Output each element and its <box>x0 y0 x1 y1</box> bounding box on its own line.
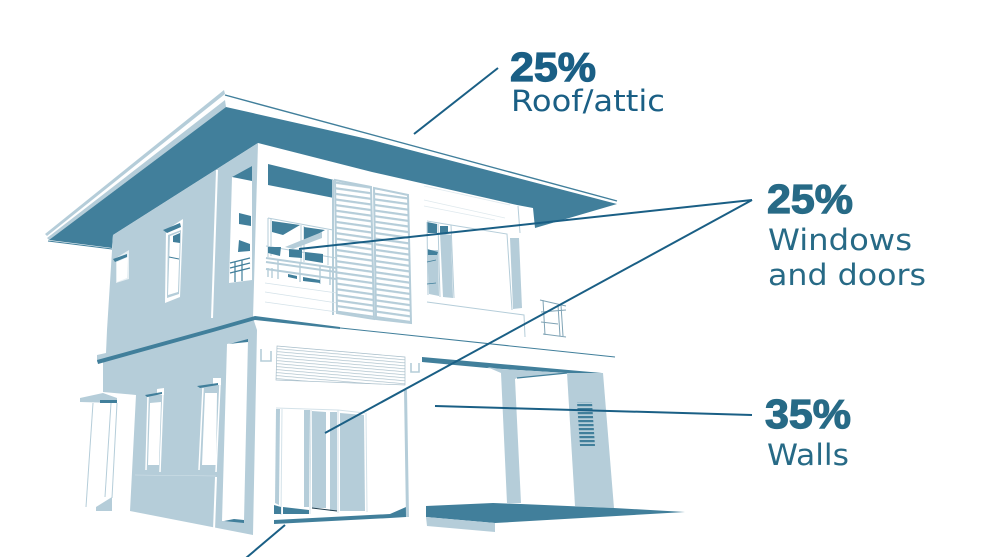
small side railing <box>540 300 566 337</box>
label: roof/attic: Roof/attic <box>511 84 665 118</box>
leader lines <box>246 68 752 557</box>
sliding doors <box>274 408 406 524</box>
carport beam <box>422 357 602 373</box>
label: windows and doors <box>767 176 926 292</box>
label: windows and doors: and doors <box>768 258 926 292</box>
label: roof/attic: 25% <box>510 44 596 90</box>
label: walls: 35% <box>765 391 851 437</box>
carport column right <box>567 373 614 508</box>
balcony railing <box>265 258 337 312</box>
roof <box>45 90 617 249</box>
label: windows and doors: Windows <box>768 223 912 257</box>
floor band <box>97 316 340 364</box>
thin post <box>404 390 409 517</box>
lower wall details <box>135 339 248 530</box>
leader: roof <box>414 68 498 134</box>
lower window left <box>145 388 164 472</box>
label: walls: Walls <box>767 438 849 472</box>
label: windows and doors: 25% <box>767 176 853 222</box>
leader: floor <box>246 525 285 557</box>
brackets <box>261 349 419 372</box>
side porch <box>80 393 117 511</box>
siding lines <box>424 186 510 220</box>
leader: walls <box>435 406 752 415</box>
leader: windows <box>299 200 752 249</box>
house illustration <box>45 90 685 535</box>
louvred shutters <box>335 180 411 323</box>
carport column left <box>487 367 567 503</box>
wall vent <box>577 402 595 446</box>
upper recess <box>229 166 252 283</box>
walls, left side <box>97 143 258 535</box>
carport slab <box>426 503 685 532</box>
balcony ceiling <box>268 164 334 198</box>
label: walls <box>765 391 851 472</box>
upper left small window <box>113 250 129 283</box>
lower window right <box>197 378 221 472</box>
balcony window <box>266 218 336 265</box>
label: roof/attic <box>510 44 665 118</box>
lower louvre vent <box>276 346 405 385</box>
upper right window <box>427 206 525 337</box>
leader: doors <box>325 200 752 433</box>
upper left tall window <box>163 219 183 303</box>
